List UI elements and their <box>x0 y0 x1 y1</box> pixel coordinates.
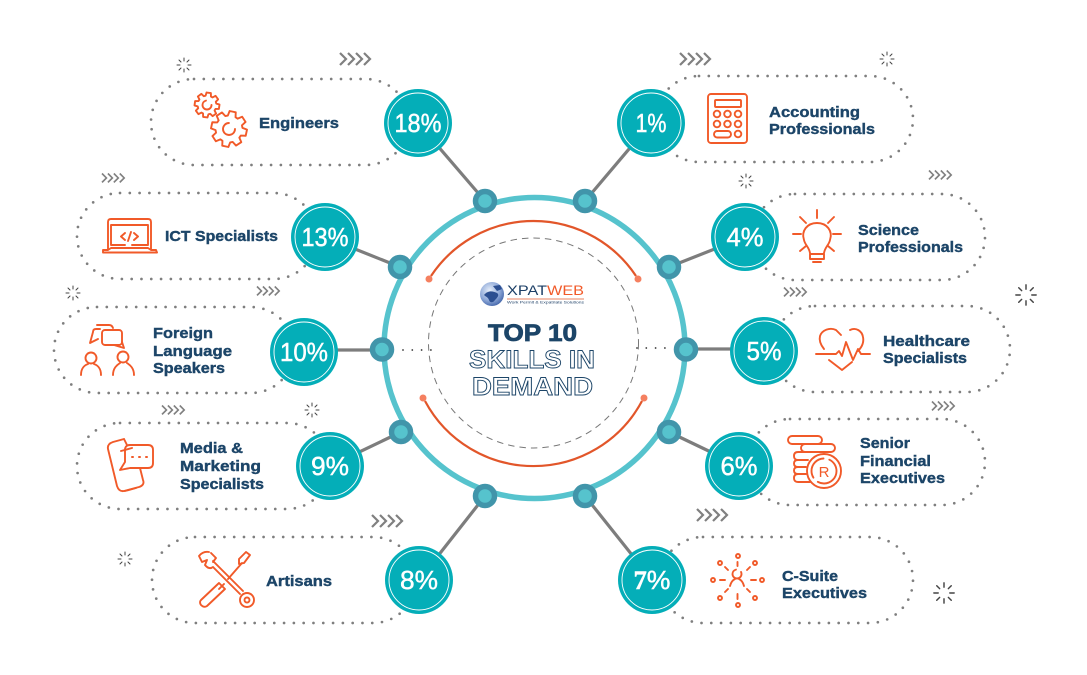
panel: Science Professionals 4%: 4% <box>726 222 764 252</box>
panel: Artisans 8%: 8% <box>400 565 438 595</box>
panel: Healthcare Specialists 5%: 5% <box>746 336 782 366</box>
panel: Artisans 8% <box>152 537 453 623</box>
connector lines <box>304 123 764 580</box>
panel: Senior Financial Executives 6% <box>705 419 985 505</box>
panel: Foreign Language Speakers 10%: Foreign <box>153 325 213 342</box>
panel: Artisans 8%: Artisans <box>266 573 332 590</box>
icon: coins: R <box>819 464 830 481</box>
decorative chevrons <box>102 53 954 527</box>
panel: ICT Specialists 13% <box>77 193 359 279</box>
title: TOP 10 <box>488 320 577 347</box>
panel: C-Suite Executives 7%: C-Suite <box>782 568 838 585</box>
panel: Media & Marketing Specialists 9% <box>77 423 364 509</box>
icon: calculator <box>708 94 747 143</box>
panel: Science Professionals 4%: Professionals <box>858 239 963 256</box>
panel: Media & Marketing Specialists 9%: Specialists <box>180 476 264 493</box>
panel: Engineers 18% <box>151 79 452 165</box>
panel: Engineers 18%: Engineers <box>259 115 339 132</box>
panel: Science Professionals 4%: Science <box>858 222 919 239</box>
panel: C-Suite Executives 7%: Executives <box>782 585 867 602</box>
logo: Xpatweb <box>480 282 584 306</box>
panel: Senior Financial Executives 6%: 6% <box>720 451 758 481</box>
panel: Foreign Language Speakers 10%: 10% <box>280 337 328 367</box>
panel: ICT Specialists 13%: ICT Specialists <box>165 228 278 245</box>
dashed inner circle <box>428 238 638 448</box>
icon: people talking <box>81 325 134 375</box>
ring nodes <box>372 192 696 506</box>
title <box>469 320 595 401</box>
panel: Foreign Language Speakers 10%: Language <box>153 343 232 360</box>
panel: Accounting Professionals 1% <box>617 76 913 162</box>
panel: Accounting Professionals 1%: 1% <box>636 108 666 138</box>
panel: Science Professionals 4% <box>711 194 985 280</box>
title: SKILLS IN <box>469 346 595 374</box>
decorative sparkles <box>66 52 1036 603</box>
icon: light bulb <box>793 210 841 262</box>
panel: C-Suite Executives 7%: 7% <box>634 565 670 595</box>
panel: Media & Marketing Specialists 9%: Media & <box>180 440 243 457</box>
logo: Xpatweb: Work Permit & Expatriate Solutions <box>507 300 584 304</box>
panel: Foreign Language Speakers 10% <box>54 307 338 393</box>
icon: laptop code <box>103 219 157 252</box>
icon: wrench and screwdriver <box>199 552 254 607</box>
central ring <box>384 198 685 498</box>
panel: Media & Marketing Specialists 9%: Marketing <box>180 458 261 475</box>
orange arcs <box>420 221 648 466</box>
panel: C-Suite Executives 7% <box>618 537 913 623</box>
panel: Healthcare Specialists 5% <box>730 306 1010 392</box>
icon: executive network <box>711 554 764 607</box>
panel: Senior Financial Executives 6%: Financial <box>860 453 931 470</box>
icon: phone and chat <box>108 439 153 491</box>
panel: Accounting Professionals 1%: Professionals <box>769 121 875 138</box>
panel: Healthcare Specialists 5%: Healthcare <box>883 333 970 350</box>
logo: Xpatweb: WEB <box>547 282 584 298</box>
panel: Accounting Professionals 1%: Accounting <box>769 104 860 121</box>
dotted inner connectors <box>403 348 666 350</box>
panel: Foreign Language Speakers 10%: Speakers <box>153 360 225 377</box>
icon: coins <box>788 436 841 488</box>
icon: gears <box>193 91 250 150</box>
title: DEMAND <box>472 373 593 401</box>
icon: heart with pulse <box>816 329 870 370</box>
panel: Healthcare Specialists 5%: Specialists <box>883 350 967 367</box>
panel: ICT Specialists 13%: 13% <box>302 222 348 252</box>
panel: Media & Marketing Specialists 9%: 9% <box>311 451 349 481</box>
panel: Senior Financial Executives 6%: Senior <box>860 435 910 452</box>
panel: Engineers 18%: 18% <box>394 108 442 138</box>
logo: Xpatweb: XPAT <box>507 282 548 298</box>
panel: Senior Financial Executives 6%: Executives <box>860 470 945 487</box>
